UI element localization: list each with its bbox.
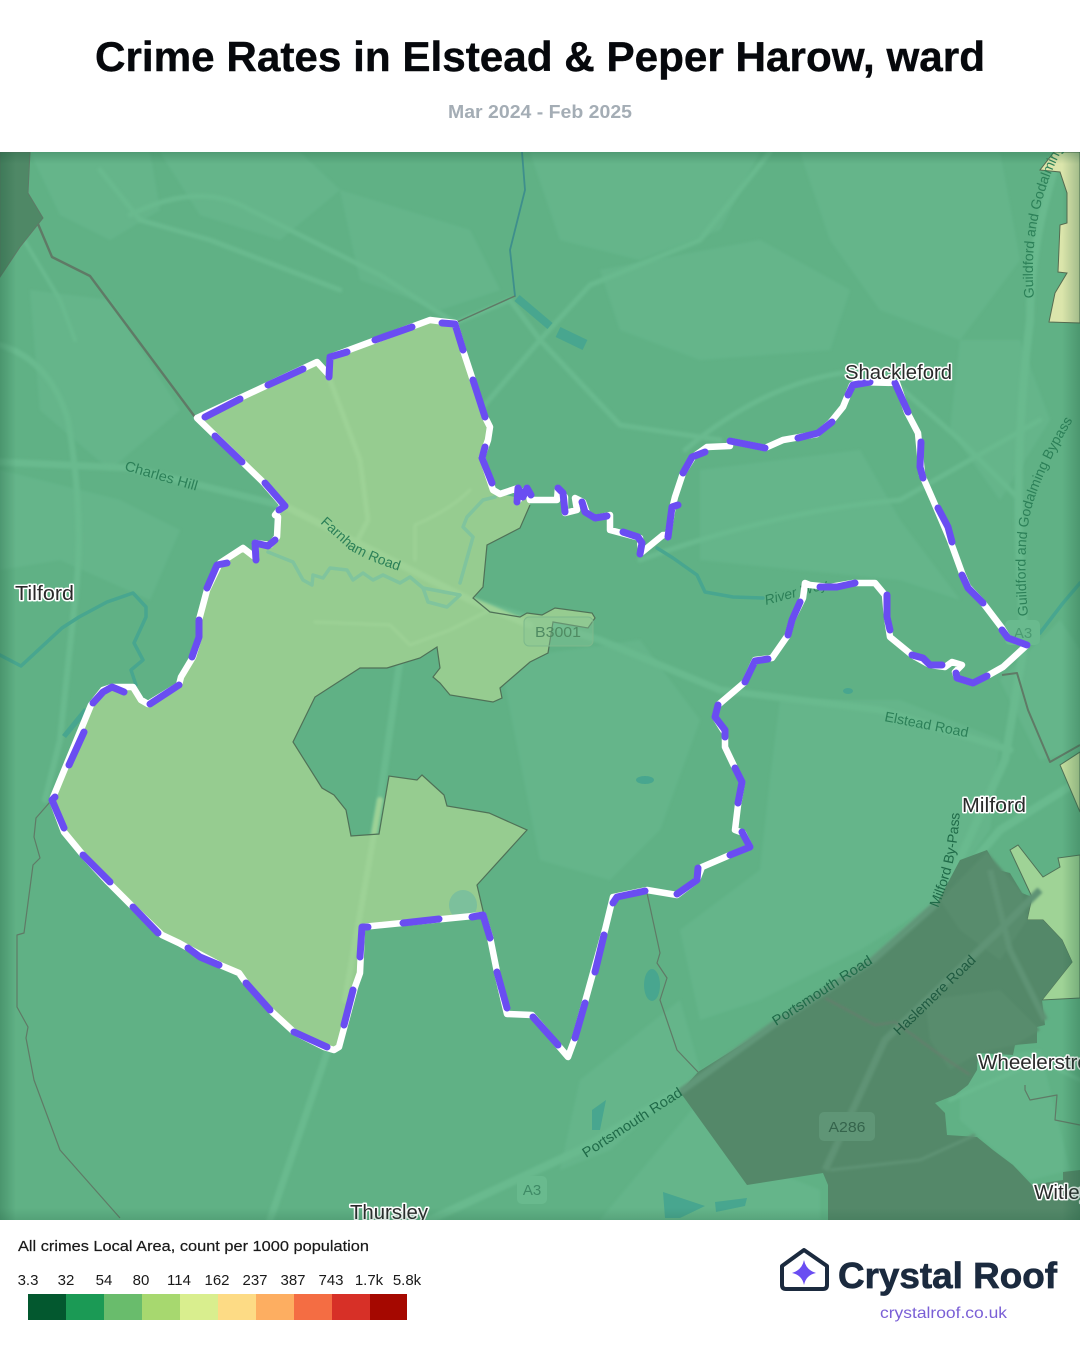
legend scale labels xyxy=(18,1272,422,1289)
road badge: A3 south: A3 xyxy=(523,1182,541,1199)
road label: Haslemere Road: Haslemere Road xyxy=(890,952,979,1038)
map edge shading xyxy=(0,152,1080,1220)
ward boundary of hole xyxy=(293,505,595,915)
road label: Guildford and Godalming: Guildford and Godalming xyxy=(1022,152,1064,298)
legend scale labels: 114 xyxy=(167,1272,191,1289)
road label: Portsmouth Road south: Portsmouth Road xyxy=(579,1084,685,1161)
icon: house with star xyxy=(782,1250,827,1289)
road label: Elstead Road: Elstead Road xyxy=(883,708,970,740)
road label: Milford By-Pass: Milford By-Pass xyxy=(930,813,960,907)
subtitle: date range: Mar 2024 - Feb 2025 xyxy=(448,102,632,122)
legend scale labels: 54 xyxy=(96,1272,112,1289)
legend scale labels: 1.7k xyxy=(355,1272,384,1289)
logo wordmark: Crystal Roof xyxy=(838,1255,1058,1296)
ward roads xyxy=(278,505,520,834)
high-rate area: top left xyxy=(0,152,43,277)
legend scale labels: 162 xyxy=(204,1272,230,1289)
land-use patches xyxy=(0,152,1080,1220)
place label: Shackleford: Shackleford xyxy=(845,362,952,384)
ward outline: purple dashes xyxy=(52,323,1027,1047)
road badge: B3001 xyxy=(524,617,593,646)
road badge: A3 east: A3 xyxy=(1014,625,1032,642)
title: Crime Rates in Elstead & Peper Harow, ward xyxy=(95,33,985,80)
road label: Charles Hill: Charles Hill xyxy=(123,458,200,494)
logo: Crystal Roof xyxy=(782,1250,1058,1322)
neighbouring area: right, Milford xyxy=(1010,845,1080,1000)
neighbourhood boundary lines xyxy=(17,224,1080,1218)
legend scale labels: 237 xyxy=(242,1272,268,1289)
neighbouring area: east edge xyxy=(1060,752,1080,812)
road badge: A286 xyxy=(819,1112,875,1141)
legend scale labels: 387 xyxy=(280,1272,306,1289)
road label: River Wey: River Wey xyxy=(763,576,830,608)
logo url: crystalroof.co.uk xyxy=(880,1305,1008,1322)
road badge: A3 east xyxy=(1005,620,1040,645)
road label: Guildford and Godalming Bypass: Guildford and Godalming Bypass xyxy=(1015,418,1072,616)
legend scale labels: 743 xyxy=(318,1272,344,1289)
low-crime neighbouring area: top right xyxy=(1040,152,1080,323)
high-rate area: Witley and Milford south xyxy=(680,850,1080,1220)
road label: Farnham Road: Farnham Road xyxy=(320,516,401,570)
place label: Milford: Milford xyxy=(962,795,1026,817)
dark-area lighter tones and roads xyxy=(680,852,1045,1170)
legend scale labels: 80 xyxy=(133,1272,149,1289)
road badge: A286: A286 xyxy=(828,1119,866,1136)
place label: Thursley: Thursley xyxy=(350,1202,428,1224)
ward area: Elstead & Peper Harow fill xyxy=(52,320,595,1050)
road badge: B3001: B3001 xyxy=(535,624,581,641)
legend xyxy=(18,1238,422,1320)
rivers xyxy=(0,152,1080,685)
legend scale labels: 3.3 xyxy=(18,1272,38,1289)
legend title: All crimes Local Area, count per 1000 population xyxy=(18,1238,369,1255)
ward outline: white base line xyxy=(52,320,1027,1057)
ponds xyxy=(62,688,853,1218)
legend scale labels: 5.8k xyxy=(393,1272,422,1289)
road network xyxy=(0,152,1080,1220)
place label: Tilford: Tilford xyxy=(15,583,74,605)
road badge: A3 south xyxy=(517,1176,547,1204)
legend colour ramp xyxy=(28,1294,407,1320)
road label: Portsmouth Road north: Portsmouth Road xyxy=(769,952,875,1029)
legend scale labels: 32 xyxy=(58,1272,74,1289)
